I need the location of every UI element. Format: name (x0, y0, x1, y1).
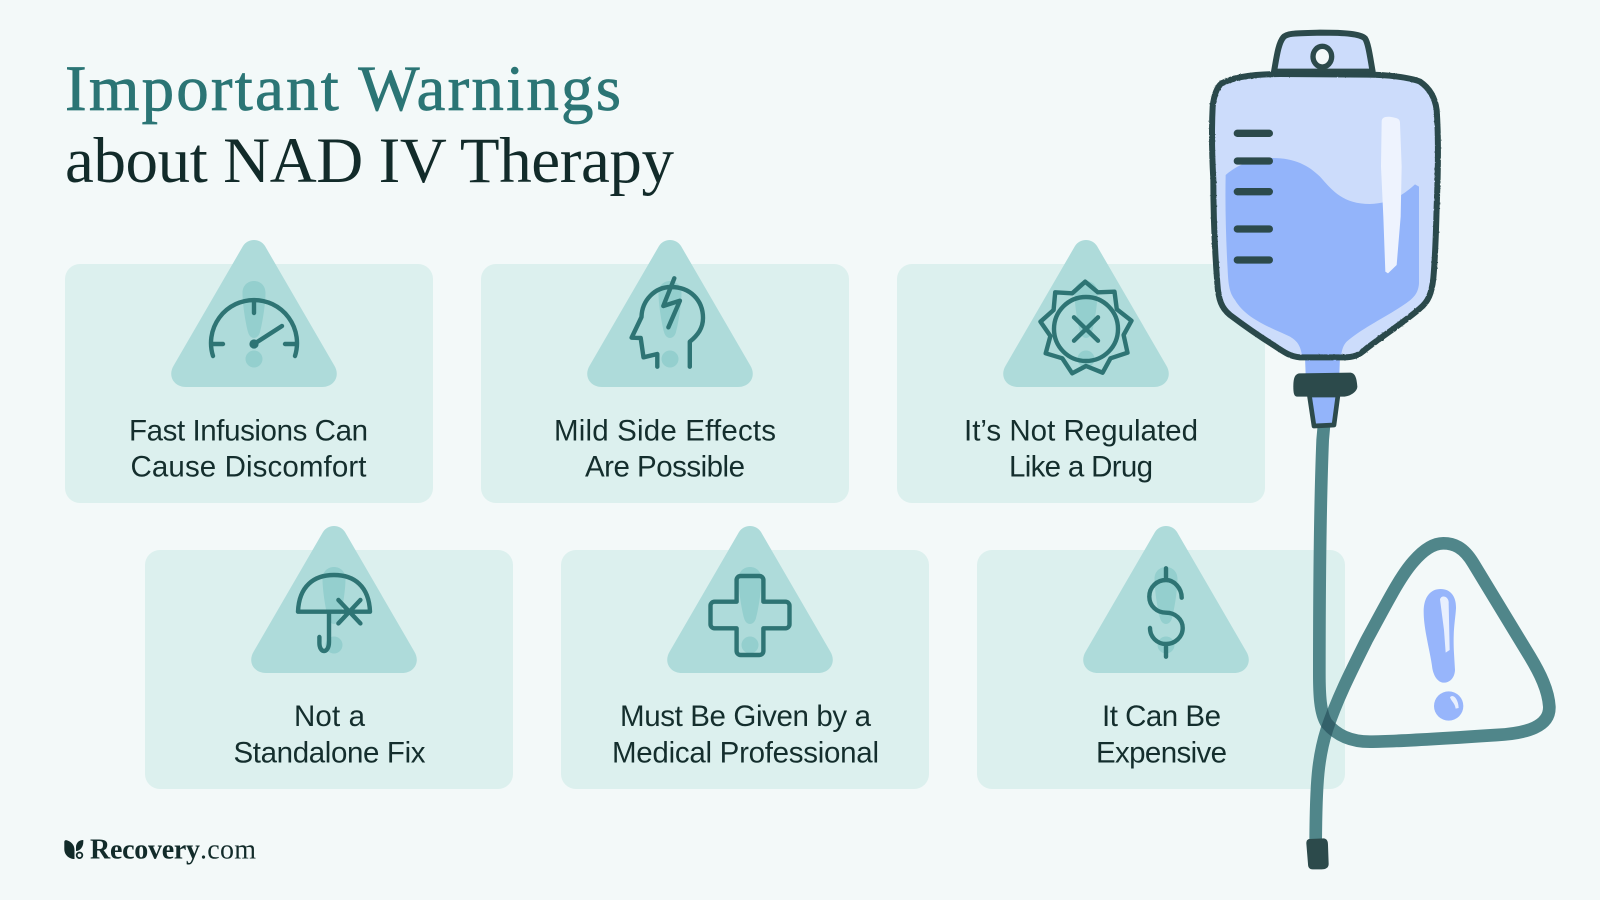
title (65, 53, 674, 197)
bag neck (1305, 357, 1340, 375)
label: Fast Infusions Can (129, 414, 368, 448)
bag body (1212, 74, 1438, 357)
logo: Recovery.com: .com (200, 834, 256, 866)
bag hanger (1274, 33, 1373, 72)
tube end cap (1306, 838, 1329, 869)
icon: badge with x in warning triangle (1003, 240, 1169, 387)
card: expensive (977, 526, 1345, 789)
label (234, 700, 426, 770)
label: Cause Discomfort (130, 450, 366, 484)
label: Not a (294, 700, 366, 733)
label: Expensive (1096, 736, 1227, 770)
label (612, 700, 879, 770)
label (129, 414, 368, 484)
label: Mild Side Effects (554, 414, 776, 448)
card: not regulated (897, 240, 1265, 503)
icon: blue exclamation mark (1424, 589, 1463, 721)
icon: head with lightning bolt in warning triangle (587, 240, 753, 387)
label (554, 414, 776, 484)
card: mild side effects (481, 240, 849, 503)
title line: Important Warnings: Important Warnings (65, 53, 621, 125)
card: medical professional (561, 526, 929, 789)
icon: dollar sign in warning triangle (1083, 526, 1249, 673)
label: Medical Professional (612, 736, 879, 770)
label: Like a Drug (1009, 450, 1153, 484)
bag liquid (1225, 158, 1419, 357)
icon: logo leaves (64, 840, 83, 859)
illustration: IV bag (1212, 33, 1438, 426)
icon: medical cross in warning triangle (667, 526, 833, 673)
card: not a standalone fix (145, 526, 513, 789)
title line: about NAD IV Therapy: about NAD IV Therapy (65, 125, 674, 197)
label: Must Be Given by a (620, 700, 872, 733)
label: Standalone Fix (234, 736, 426, 770)
icon: umbrella with x in warning triangle (251, 526, 417, 673)
measurement ticks (1237, 133, 1269, 260)
label: Are Possible (585, 450, 745, 484)
icon: gauge in warning triangle (171, 240, 337, 387)
label (1096, 700, 1227, 770)
logo: Recovery.com (64, 834, 256, 866)
bag highlight (1381, 117, 1402, 273)
logo: Recovery.com: Recovery (90, 834, 200, 866)
card: fast infusions (65, 240, 433, 503)
illustration: tubing and warning triangle (1306, 425, 1549, 869)
bag outline (1212, 74, 1438, 357)
lower connector (1309, 395, 1338, 426)
label (964, 414, 1198, 484)
label: It Can Be (1102, 700, 1221, 733)
label: It’s Not Regulated (964, 414, 1198, 448)
clamp (1293, 373, 1357, 397)
